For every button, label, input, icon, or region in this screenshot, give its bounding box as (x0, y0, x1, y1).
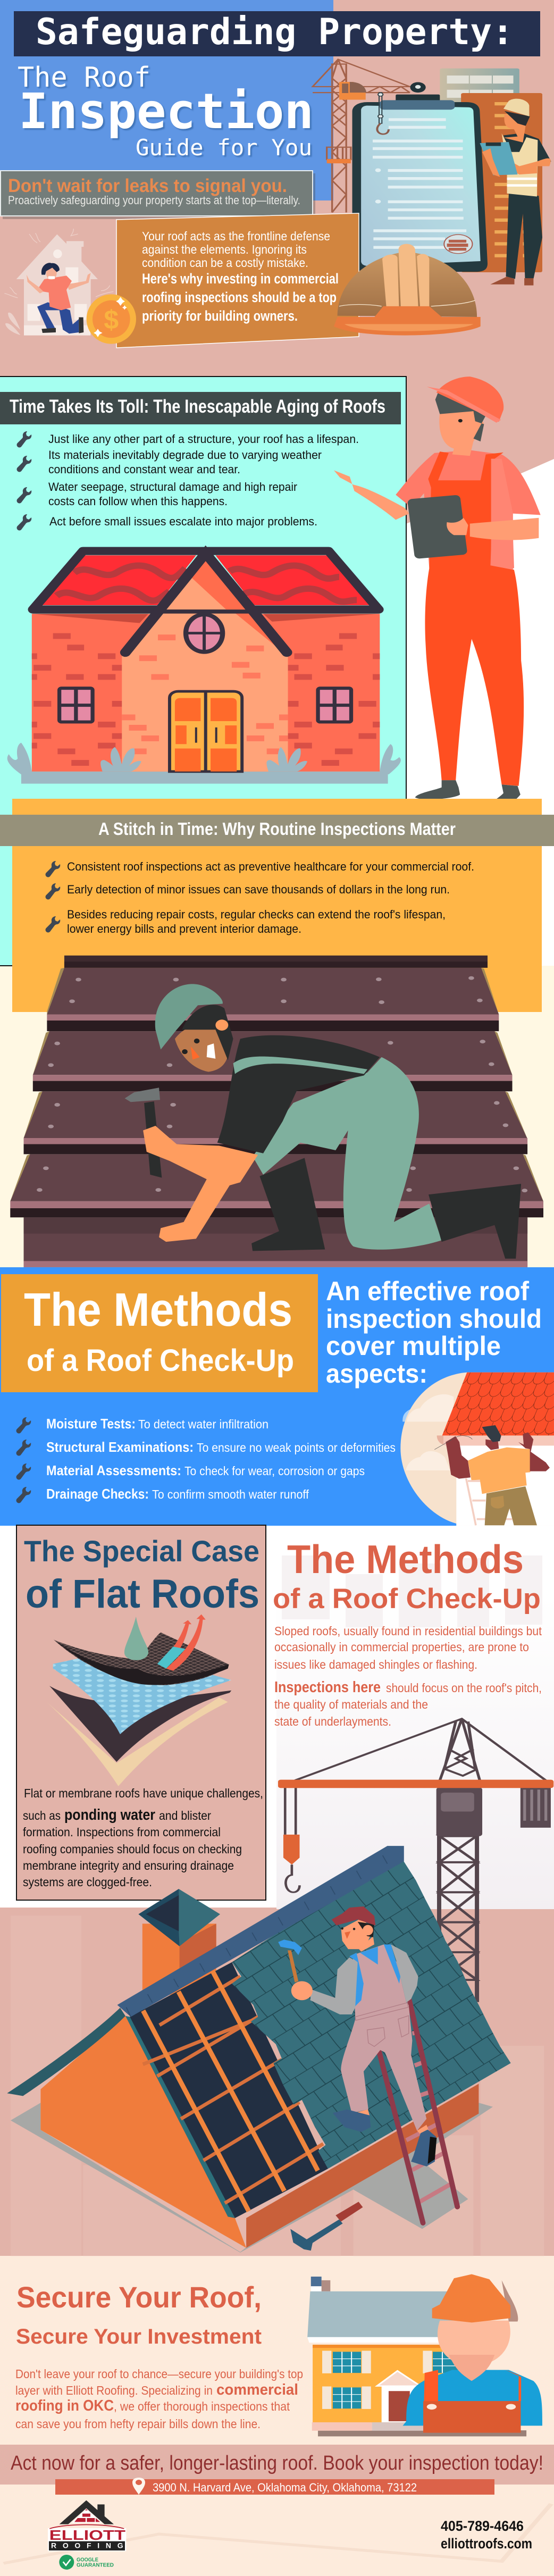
badge: google guaranteed (59, 2555, 114, 2570)
panel: frontline defense text: roofing inspections should be a top (142, 289, 337, 305)
contact details (441, 2518, 532, 2552)
body text: membrane integrity and ensuring drainage (23, 1859, 234, 1872)
body text: , we offer thorough inspections that (114, 2399, 290, 2413)
logo: elliott roofing: ELLIOTT (49, 2527, 125, 2543)
illustration: worried homeowner and coin: $ (104, 305, 119, 334)
illustration: house and inspector bust (307, 2274, 542, 2436)
list: inspection aspects: Moisture Tests: (46, 1416, 136, 1432)
list: routine inspection bullets (67, 860, 474, 935)
box: the methods of a roof check-up: The Methods (24, 1283, 292, 1336)
callout: don't wait for leaks: Proactively safeguarding your property starts at the top—literally. (8, 194, 300, 207)
illustration: house under re-roofing (7, 1846, 544, 2256)
panel: secure your roof (15, 2274, 542, 2436)
heading (24, 1534, 259, 1617)
roof tiers (10, 956, 543, 1267)
heading bar: A Stitch in Time: Why Routine Inspections Matter (98, 819, 456, 839)
panel: a stitch in time (0, 799, 554, 1012)
panel: frontline defense text: Your roof acts as the frontline defense (142, 229, 330, 243)
icons: wrenches (17, 431, 31, 531)
illustration: inspector with vest (480, 99, 551, 286)
heading bar (0, 392, 401, 424)
body text: and blister (159, 1809, 211, 1822)
heading: The Methods (287, 1537, 524, 1582)
text: effective roof inspection: aspects: (326, 1359, 427, 1389)
roofer figure (125, 984, 521, 1259)
list: aging bullets: Just like any other part of a structure, your roof has a lifespan. (48, 432, 359, 446)
faint building backdrop (276, 1555, 554, 1909)
logo: elliott roofing (48, 2500, 126, 2551)
panel: frontline defense text: condition can be a costly mistake. (142, 256, 308, 270)
body text: issues like damaged shingles or flashing. (274, 1658, 477, 1671)
heading: of a Roof Check-Up (273, 1583, 541, 1615)
body text: Flat or membrane roofs have unique challenges, (24, 1786, 263, 1800)
list: inspection aspects: To confirm smooth water runoff (152, 1487, 309, 1501)
callout: don't wait for leaks: Don't wait for leaks to signal you. (8, 175, 287, 196)
illustration: roofer with hammer on roof tiers (10, 956, 543, 1267)
panel: frontline defense text (116, 213, 359, 348)
box: the methods of a roof check-up (1, 1274, 318, 1392)
panel: frontline defense text: Here's why investing in commercial (142, 271, 339, 287)
text: effective roof inspection (326, 1276, 542, 1389)
list: inspection aspects: To detect water infiltration (138, 1417, 268, 1431)
badge: google guaranteed: GUARANTEED (77, 2563, 114, 2569)
illustration: worker in orange overalls (334, 377, 541, 809)
body text: the quality of materials and the (274, 1697, 428, 1711)
body text: occasionally in commercial properties, are prone to (274, 1640, 529, 1654)
illustration: tower crane (278, 1719, 553, 2001)
list: inspection aspects: Drainage Checks: (46, 1486, 149, 1502)
illustration: roof membrane layers (47, 1615, 231, 1786)
panel: call to action band (0, 2445, 554, 2485)
panel: frontline defense text: priority for building owners. (142, 308, 298, 324)
heading: the roof inspection guide: Inspection (19, 83, 314, 140)
panel: time takes its toll (0, 377, 406, 966)
badge: google guaranteed: GOOGLE (77, 2557, 98, 2563)
body text: should focus on the roof's pitch, (386, 1681, 542, 1695)
heading: the roof inspection guide: The Roof (18, 62, 150, 94)
illustration: crane (313, 60, 410, 213)
body text: layer with Elliott Roofing. Specializing in (15, 2383, 213, 2397)
logo: elliott roofing: ROOFING (51, 2541, 123, 2550)
body text: state of underlayments. (274, 1714, 391, 1728)
body text: ponding water (64, 1806, 155, 1824)
body text: can save you from hefty repair bills down the line. (15, 2417, 261, 2431)
text: effective roof inspection: An effective roof (326, 1276, 529, 1306)
body text: roofing in OKC (15, 2397, 114, 2414)
body text (15, 2367, 303, 2431)
icons: wrenches (16, 1417, 31, 1503)
list: inspection aspects: Structural Examinations: (46, 1439, 194, 1455)
body text: such as (23, 1809, 61, 1822)
body text: Don't leave your roof to chance—secure your building's top (15, 2367, 303, 2381)
illustration: hard hat (334, 244, 481, 336)
text: effective roof inspection: cover multiple (326, 1331, 501, 1361)
list: aging bullets (48, 432, 359, 528)
tool: hammer on ground (290, 2202, 363, 2251)
address bar: 3900 N. Harvard Ave, Oklahoma City, Oklahoma, 73122 (153, 2481, 417, 2494)
list: inspection aspects: Material Assessments: (46, 1462, 181, 1478)
icons: wrenches (46, 861, 60, 933)
body text (274, 1624, 542, 1728)
list: aging bullets: conditions and constant wear and tear. (48, 463, 240, 476)
list: aging bullets: costs can follow when this happens. (48, 495, 228, 508)
callout: don't wait for leaks (1, 171, 315, 219)
heading: Secure Your Investment (16, 2325, 262, 2348)
body text: commercial (216, 2381, 298, 2398)
heading: the roof inspection guide: Guide for You (136, 135, 312, 161)
illustration: clipboard (352, 82, 488, 272)
body text (23, 1786, 263, 1889)
heading: The Special Case (24, 1534, 259, 1568)
title bar: Safeguarding Property: (36, 11, 514, 53)
list: routine inspection bullets: Early detection of minor issues can save thousands of dollars in the long run. (67, 883, 450, 896)
illustration: brick house (7, 551, 401, 784)
contact details: elliottroofs.com (441, 2536, 532, 2552)
heading (273, 1537, 541, 1615)
body text: roofing companies should focus on checking (23, 1842, 242, 1856)
panel: methods of a roof check-up (1, 1274, 554, 1526)
illustration: buildings (440, 69, 542, 272)
list: inspection aspects (46, 1416, 396, 1502)
body text: Inspections here (274, 1679, 381, 1696)
heading bar: Time Takes Its Toll: The Inescapable Aging of Roofs (10, 396, 385, 417)
list: routine inspection bullets: lower energy bills and prevent interior damage. (67, 922, 301, 935)
heading: of Flat Roofs (26, 1571, 259, 1617)
house body (7, 1889, 544, 2256)
address bar (55, 2478, 494, 2495)
roof deck, shingles and ridge (117, 1846, 511, 2218)
figure: roofer on ladder (278, 1906, 457, 2223)
list: routine inspection bullets: Besides reducing repair costs, regular checks can extend the roof's lifespan, (67, 908, 446, 921)
body text: systems are clogged-free. (23, 1875, 152, 1889)
list: inspection aspects: To ensure no weak points or deformities (197, 1441, 396, 1454)
list: aging bullets: Act before small issues escalate into major problems. (49, 515, 317, 528)
illustration: worried homeowner and coin (4, 229, 136, 344)
list: routine inspection bullets: Consistent roof inspections act as preventive healthcare for your commercial roof. (67, 860, 474, 873)
text: effective roof inspection: inspection should (326, 1304, 542, 1334)
body text: formation. Inspections from commercial (23, 1825, 221, 1839)
heading: Secure Your Roof, (16, 2280, 262, 2314)
panel: sloped roofs (273, 1537, 554, 2001)
contact details: 405-789-4646 (441, 2518, 524, 2534)
list: aging bullets: Water seepage, structural damage and high repair (48, 480, 297, 494)
decorative footer chevrons (4, 2504, 551, 2563)
panel: the special case of flat roofs (16, 1525, 266, 1900)
illustration: roofer at gutter in circle (400, 1373, 554, 1526)
panel: frontline defense text: against the elements. Ignoring its (142, 242, 307, 256)
list: inspection aspects: To check for wear, corrosion or gaps (184, 1464, 365, 1478)
heading: the roof inspection guide (18, 62, 314, 161)
box: the methods of a roof check-up: of a Roof Check-Up (27, 1343, 294, 1378)
heading (16, 2280, 262, 2348)
panel: hero (1, 11, 551, 348)
list: aging bullets: Its materials inevitably degrade due to varying weather (48, 448, 322, 462)
heading bar (0, 815, 554, 846)
